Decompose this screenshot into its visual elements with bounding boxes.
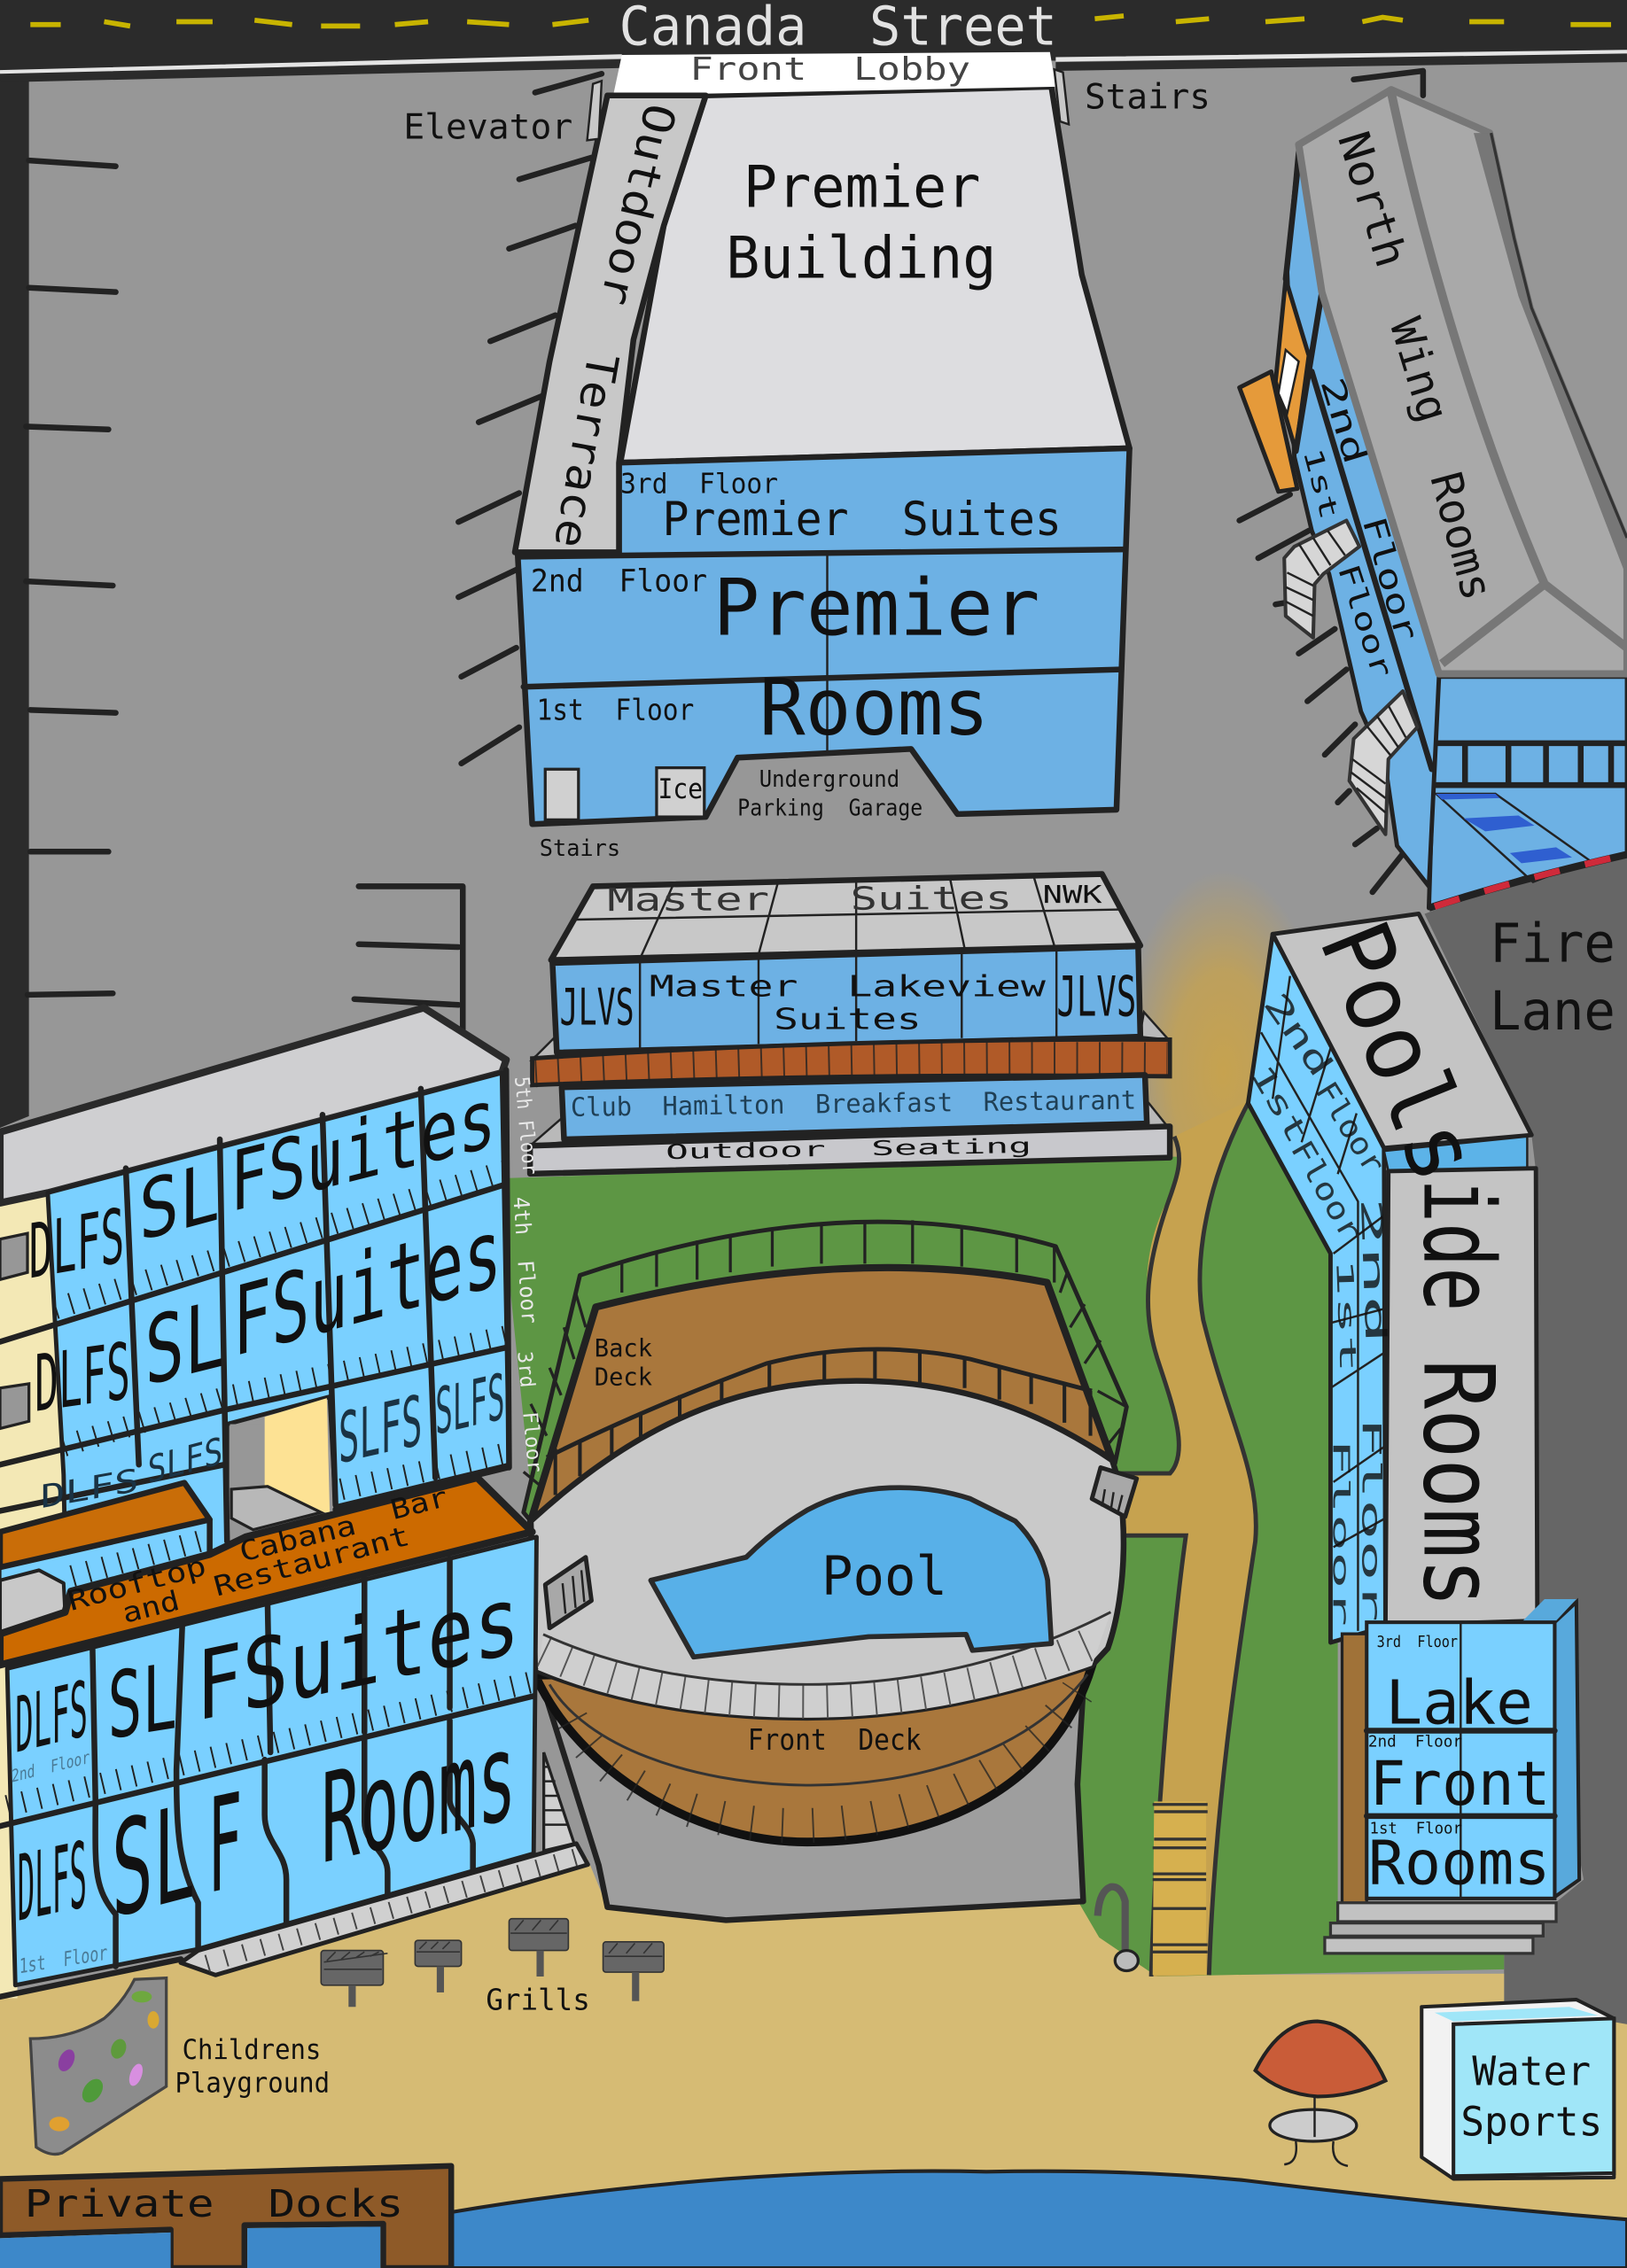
- vertical floor labels: 3rd Floor: [512, 1350, 546, 1473]
- panel: Private Docks: Private Docks: [25, 2183, 403, 2226]
- lake side wall: [1554, 1602, 1579, 1897]
- north wing roof: Wing: [1380, 312, 1459, 428]
- concrete right edge: [1078, 1666, 1085, 1901]
- fire lane label: Lane: [1490, 981, 1615, 1043]
- rooftop cabana bar: Restaurant: [211, 1520, 413, 1603]
- lake labels: 2nd Floor: [1368, 1732, 1462, 1751]
- 3rd floor labels: SLFS: [339, 1379, 423, 1480]
- 5th floor labels: SL: [139, 1144, 220, 1260]
- label: childrens playground: [175, 2034, 330, 2100]
- 4th floor labels: DLFS: [35, 1325, 130, 1430]
- master roof: Master Suites: [607, 881, 1012, 919]
- north wing floor labels: Floor: [1355, 513, 1425, 645]
- underground parking label: [737, 766, 922, 821]
- master blue wall: JLVS: [1057, 965, 1136, 1029]
- premier roof: Premier: [743, 153, 980, 221]
- premier blue facade: Premier Suites: [662, 493, 1062, 547]
- rooftop cabana bar: Bar: [387, 1481, 451, 1526]
- lower labels: 1st Floor: [19, 1942, 107, 1978]
- road: Canada Street: [0, 0, 1627, 78]
- lower labels: Rooms: [321, 1703, 517, 1892]
- lake labels: Front: [1370, 1749, 1551, 1820]
- lower labels: [12, 1564, 520, 1978]
- left parking edge: [0, 58, 29, 1128]
- orange stairwell: [1240, 279, 1309, 492]
- concrete base: [535, 1663, 1085, 1920]
- parking space lines: [26, 71, 1423, 1041]
- front lobby: [613, 51, 1055, 96]
- icon: childrens playground: [30, 1978, 167, 2155]
- pool: Pool: [821, 1546, 947, 1608]
- gates: [545, 1468, 1137, 1628]
- outdoor seating: [530, 1126, 1170, 1174]
- panel: Water Sports: Sports: [1460, 2099, 1602, 2146]
- master blue wall: Master Lakeview: [650, 969, 1046, 1003]
- stairs door: [545, 769, 579, 819]
- blue wall: [48, 1073, 509, 1627]
- windows in end wall: [0, 1233, 29, 1428]
- back deck: Back: [595, 1333, 652, 1363]
- poolside floor labels: 2nd: [1354, 1196, 1393, 1345]
- lake labels: 3rd Floor: [1377, 1633, 1458, 1651]
- fire lane: [1425, 856, 1627, 2039]
- lake top: [1522, 1599, 1576, 1622]
- underground parking label: Parking Garage: [737, 795, 922, 821]
- premier blue facade: 2nd Floor: [531, 563, 707, 599]
- north wing floor labels: 2nd: [1312, 373, 1374, 469]
- stairs right: [1055, 69, 1211, 124]
- lower labels: F: [207, 1766, 242, 1924]
- pool: [650, 1487, 1051, 1657]
- poolside rooms label: Pools: [1297, 907, 1500, 1196]
- panel: Master Suites: [530, 874, 1170, 1174]
- panel: Water Sports: [1421, 2000, 1614, 2179]
- lower labels: DLFS: [15, 1664, 88, 1771]
- panel: Water Sports: Water: [1472, 2047, 1591, 2094]
- poolside upper roof: [1273, 913, 1531, 1148]
- north wing floor labels: 1st: [1297, 445, 1345, 523]
- premier blue facade: Premier: [713, 562, 1039, 653]
- rooftop cabana bar: Rooftop: [65, 1550, 210, 1618]
- poolside floor labels: 1st: [1242, 1059, 1315, 1149]
- lake center line: [1460, 1622, 1461, 1897]
- master blue wall: [552, 946, 1140, 1052]
- poolside lower roof: [1385, 1169, 1537, 1625]
- vertical floor labels: 4th Floor: [508, 1196, 542, 1324]
- side stairs: [544, 1752, 574, 1851]
- panel: small cabana wing: [0, 1483, 210, 1641]
- premier blue facade: Rooms: [759, 662, 989, 753]
- poolside floor labels: Floor: [1356, 1417, 1386, 1622]
- boardwalk ticks: [206, 1855, 583, 1963]
- yellow door and elevator: [230, 1398, 330, 1530]
- poolside rooms label: ide: [1401, 1178, 1515, 1311]
- outdoor terrace: [515, 96, 705, 552]
- wall dividers: [1286, 159, 1432, 769]
- stairs right: Stairs: [1085, 77, 1211, 117]
- rooftop cabana bar: [0, 1478, 533, 1665]
- icon: shower: [1098, 1887, 1138, 1970]
- ice room: [657, 768, 705, 817]
- round pool deck: [531, 1381, 1124, 1718]
- label: grills: Grills: [486, 1984, 590, 2017]
- sand beach: [0, 1858, 1627, 2268]
- lower dividers: [92, 1558, 473, 1967]
- panel: Private Docks: [0, 2166, 451, 2268]
- panel: Poolside Rooms: [1242, 907, 1537, 1643]
- water: [451, 2171, 1627, 2268]
- icon: umbrella table: [1256, 2022, 1385, 2166]
- panel: SLF upper building: SLFS: [435, 1360, 505, 1450]
- roof: [0, 1008, 506, 1203]
- railing: [524, 1220, 1126, 1521]
- front deck: Front Deck: [748, 1723, 922, 1757]
- lower blue wall: [7, 1537, 536, 1985]
- label: childrens playground: Playground: [175, 2068, 330, 2100]
- panel: SLF upper building: [0, 1008, 546, 1663]
- cream end wall: [0, 1192, 73, 1663]
- back deck: [531, 1268, 1112, 1521]
- 4th floor labels: FSuites: [233, 1195, 502, 1379]
- premier blue facade: [518, 448, 1130, 824]
- panel: Lake Front Rooms: [1325, 1599, 1579, 1953]
- premier blue facade: 1st Floor: [536, 694, 694, 727]
- lower labels: SL: [107, 1644, 177, 1760]
- 5th floor labels: DLFS: [29, 1192, 124, 1297]
- fire lane label: [1490, 913, 1615, 1043]
- poolside blue ledge: [1384, 1137, 1527, 1171]
- label: stairs: Stairs: [540, 835, 620, 862]
- north wing roof: Rooms: [1420, 467, 1503, 606]
- premier blue facade: 3rd Floor: [620, 469, 778, 501]
- north wing floor labels: Floor: [1331, 560, 1399, 682]
- 5th floor labels: FSuites: [230, 1069, 496, 1231]
- lower balconies: [7, 1682, 533, 1806]
- poolside blue wall: [1248, 934, 1385, 1643]
- north wing roof: [1299, 89, 1627, 674]
- poolside floor labels: Floor: [1308, 1076, 1391, 1180]
- front lobby: Front Lobby: [689, 51, 970, 88]
- panel: Premier Building: [515, 51, 1130, 824]
- ladder: [1342, 1634, 1366, 1906]
- 3rd floor labels: DLFS: [41, 1461, 139, 1516]
- concrete edges: [538, 1672, 1083, 1920]
- outdoor seating: Outdoor Seating: [666, 1135, 1031, 1164]
- striped stairs: [1284, 521, 1417, 835]
- lower labels: SL: [112, 1775, 195, 1948]
- poolside wall lines: [1261, 976, 1385, 1631]
- premier roof: Building: [726, 224, 996, 291]
- walking path: [1110, 1100, 1256, 1977]
- lake labels: [1368, 1633, 1551, 1899]
- lawn: [499, 1100, 1504, 1977]
- fence: [538, 1612, 1110, 1718]
- 5th floor labels: [29, 1069, 496, 1297]
- poolside rooms label: [1297, 907, 1515, 1608]
- lake labels: Lake: [1385, 1667, 1533, 1738]
- rooftop cabana bar: Cabana: [237, 1510, 359, 1568]
- poolside floor labels: Floor: [1327, 1439, 1354, 1627]
- 4th floor labels: SL: [144, 1281, 224, 1408]
- balconies: [0, 1070, 509, 1542]
- master blue wall: Suites: [774, 1003, 922, 1037]
- north wing floor labels: [1297, 373, 1425, 682]
- panel: SLF lower building: [0, 1537, 588, 1998]
- 3rd floor labels: SLFS: [147, 1429, 222, 1493]
- lower labels: 2nd Floor: [12, 1747, 90, 1787]
- master roof: [551, 874, 1140, 960]
- entry steps: [1325, 1903, 1556, 1953]
- lake lines: [1366, 1731, 1554, 1816]
- balcony ticks: [535, 1058, 1167, 1071]
- poolside floor labels: 1st: [1330, 1257, 1361, 1374]
- icon: grills: [321, 1919, 664, 2007]
- club restaurant: [562, 1075, 1147, 1139]
- poolside floor labels: 2nd: [1256, 986, 1341, 1084]
- side ledges: [531, 1012, 1169, 1146]
- lake front wall: [1366, 1622, 1554, 1899]
- north wing roof: North: [1327, 126, 1416, 273]
- fire lane label: Fire: [1490, 913, 1615, 975]
- outdoor terrace: Outdoor: [590, 99, 685, 310]
- poolside floor labels: Floor: [1283, 1134, 1369, 1247]
- path glow: [1119, 870, 1327, 1275]
- outdoor terrace: Terrace: [544, 349, 628, 552]
- fire lane gate: [1428, 855, 1627, 908]
- underground parking label: Underground: [759, 766, 899, 793]
- lake labels: Rooms: [1368, 1829, 1551, 1899]
- back deck: Deck: [595, 1362, 652, 1391]
- panel: pool deck: [524, 1220, 1137, 1920]
- lake labels: 1st Floor: [1370, 1819, 1462, 1837]
- premier roof: [620, 87, 1130, 462]
- north wing front: [1428, 677, 1627, 908]
- label: childrens playground: Childrens: [183, 2034, 321, 2066]
- orange balcony band: [533, 1039, 1170, 1085]
- boardwalk: [181, 1844, 588, 1975]
- ice room: Ice: [658, 773, 703, 805]
- lower floor line: [0, 1696, 533, 1826]
- front deck: [535, 1666, 1092, 1842]
- fire lane gate red stripes: [1435, 855, 1627, 906]
- panel: North Wing: [1240, 89, 1627, 908]
- rooftop cabana bar: and: [119, 1585, 183, 1630]
- poolside rooms label: Rooms: [1401, 1359, 1515, 1608]
- lower labels: FSuites: [196, 1564, 520, 1744]
- north wing side wall: [1287, 144, 1439, 886]
- poolside floor labels: [1242, 986, 1393, 1627]
- vertical floor labels: [508, 1076, 546, 1473]
- elevator: [403, 81, 602, 148]
- elevator: Elevator: [403, 108, 572, 148]
- cream left strip: [0, 1663, 18, 1998]
- club restaurant: Club Hamilton Breakfast Restaurant: [571, 1085, 1136, 1122]
- 3rd floor labels: [41, 1360, 505, 1516]
- building base line: [0, 1959, 181, 1997]
- vertical floor labels: 5th Floor: [510, 1076, 541, 1176]
- lower labels: DLFS: [18, 1821, 87, 1943]
- master roof: NWK: [1043, 880, 1102, 909]
- master blue wall: JLVS: [560, 979, 634, 1037]
- 4th floor labels: [35, 1195, 502, 1430]
